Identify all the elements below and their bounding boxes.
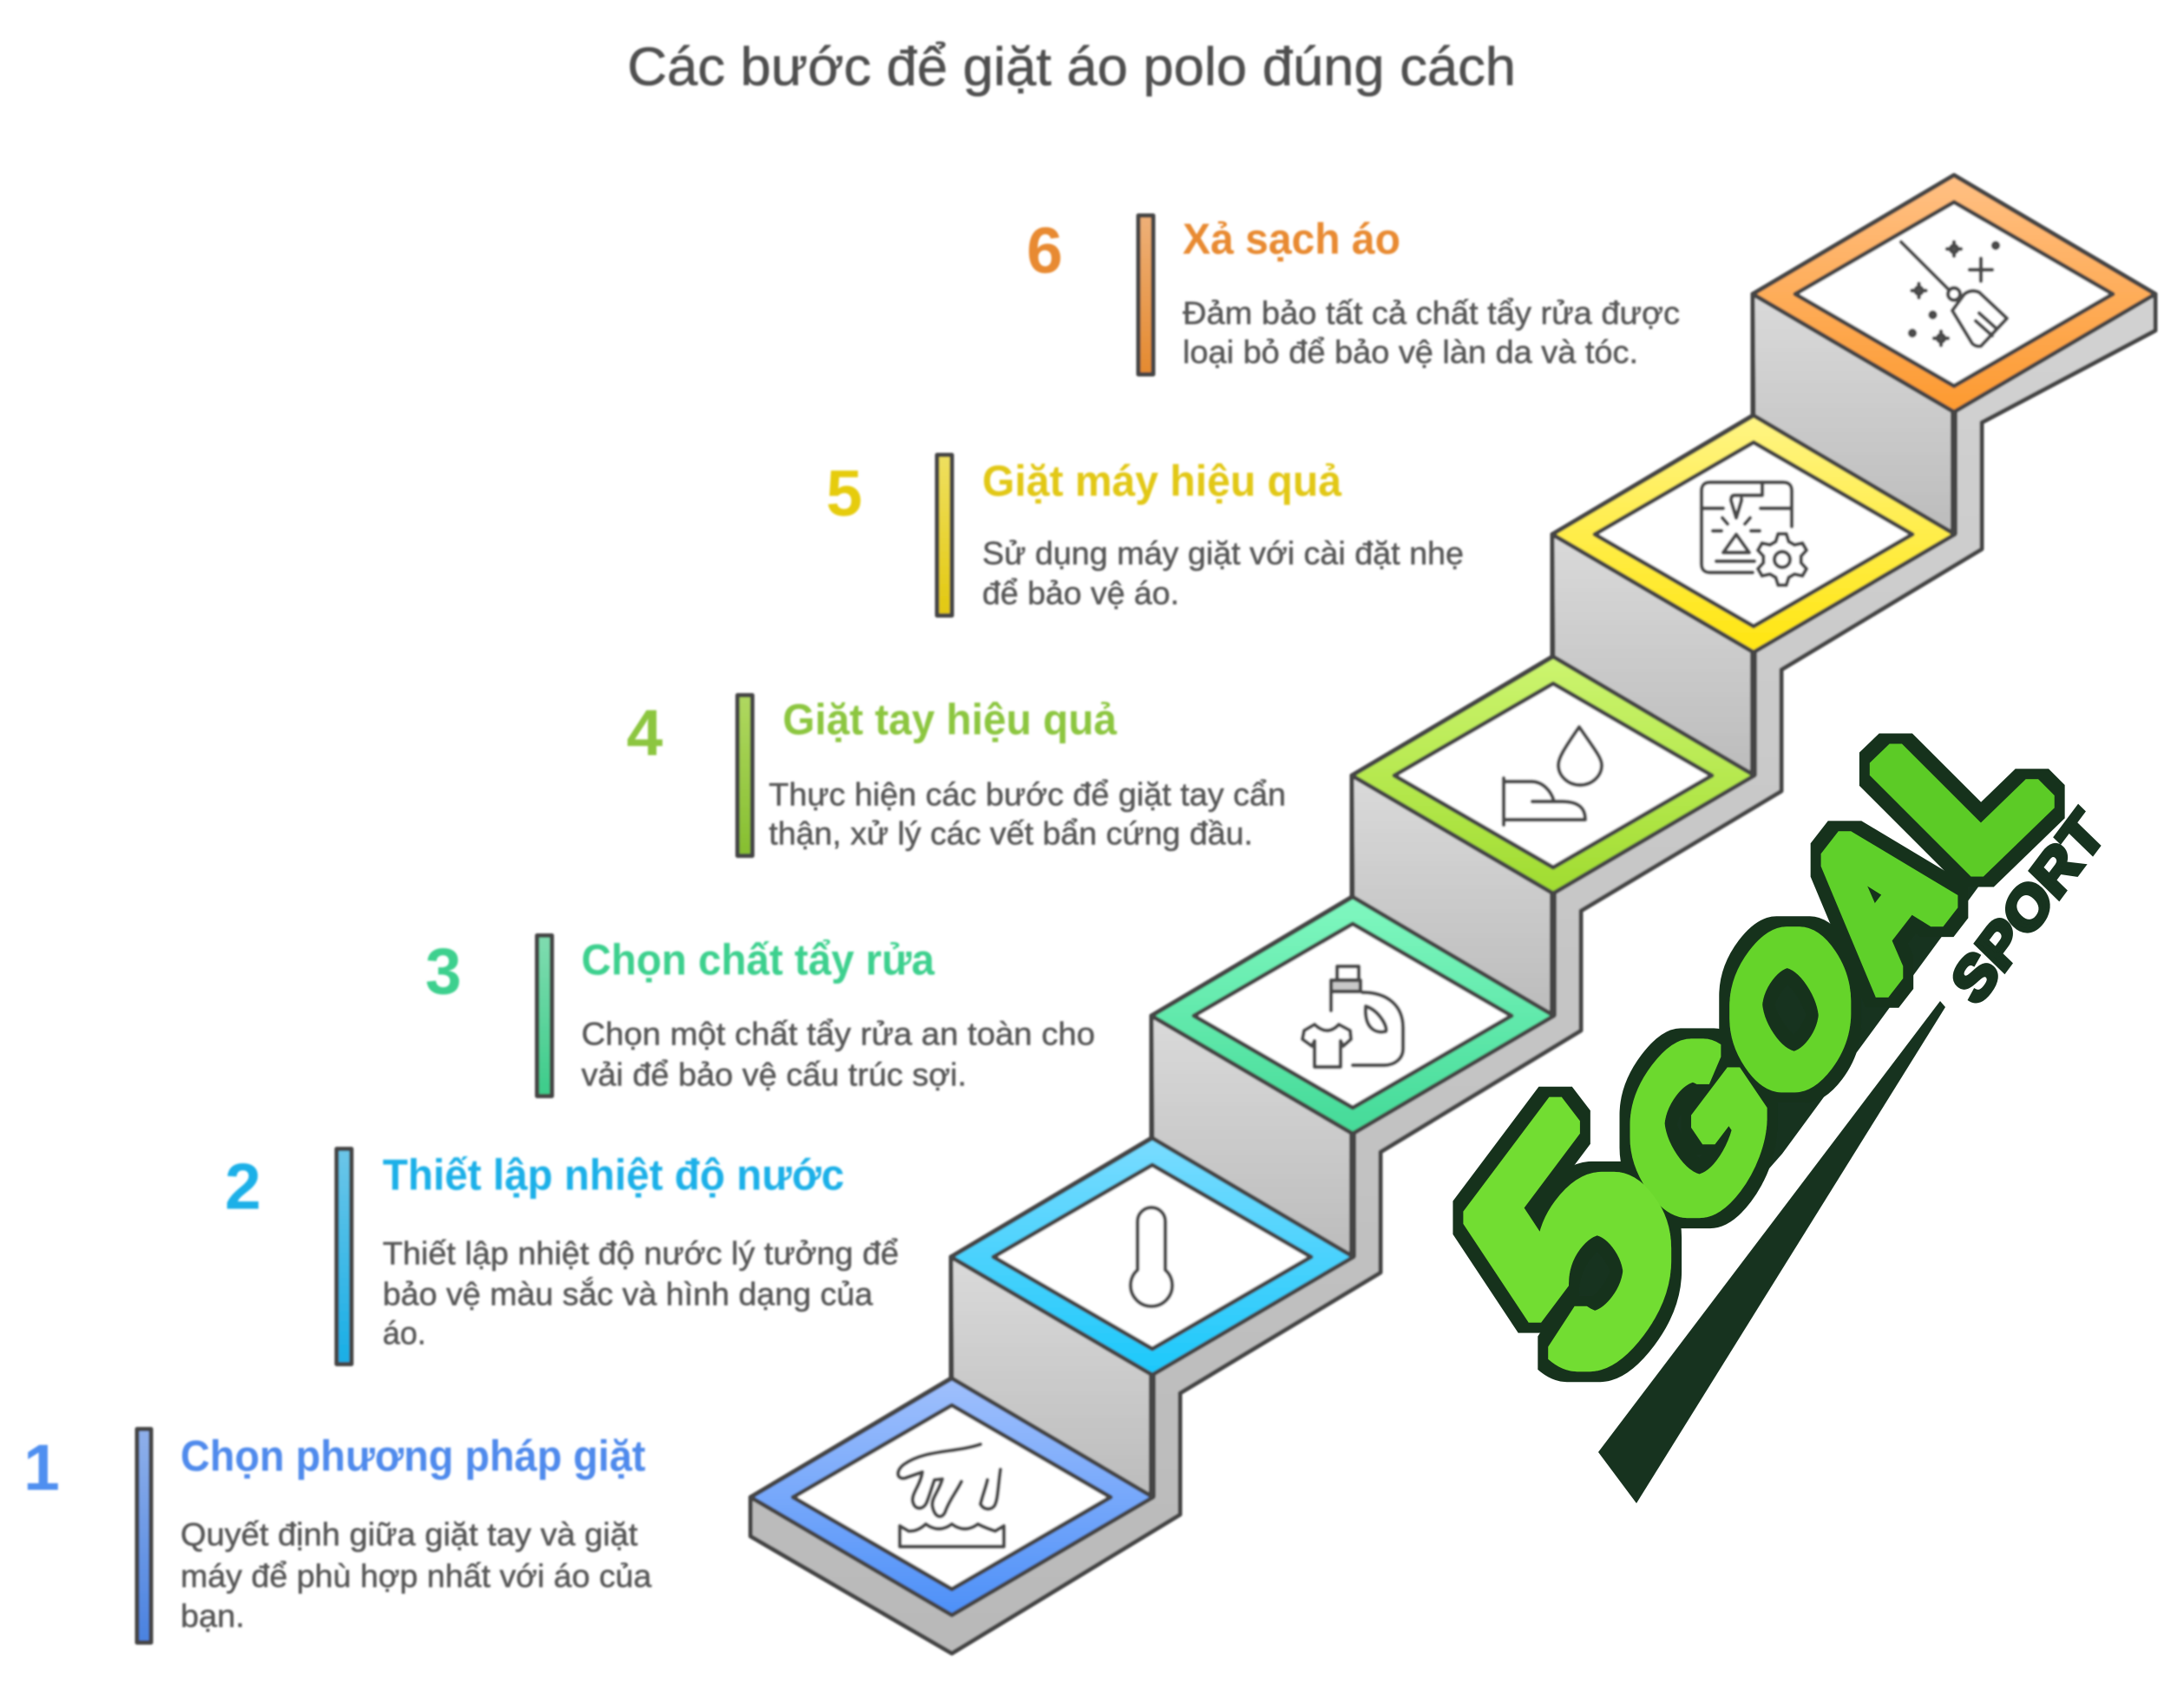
number 3: 3 [425,935,462,1008]
logo wordmark [1414,664,2084,1454]
bar 6 [1138,215,1153,375]
logo: 5GOAL SPORT [1414,664,2116,1503]
wall between steps 3 and 4 [1352,775,1553,1016]
text step 6 [1026,213,1680,375]
wall between steps 1 and 2 [951,1257,1152,1497]
step 4 tile [1352,657,1754,893]
step 6 tile [1753,175,2155,412]
wall between steps 5 and 6 [1753,294,1954,534]
bar 2 [337,1148,351,1364]
logo wordmark: L [1835,664,2084,912]
logo underline band [1735,867,1982,1197]
icon: hand washing [898,1444,1004,1547]
body 5: để bảo vệ áo. [982,576,1179,611]
step 2 tile [951,1138,1354,1375]
logo wordmark: G [1589,977,1804,1281]
number 5: 5 [826,456,862,529]
bar 4 [738,696,752,855]
body 4: Thực hiện các bước để giặt tay cẩn [769,777,1286,812]
step 3 tile [1151,897,1554,1134]
icon: detergent bottle and shirt [1302,966,1403,1067]
body 1: máy để phù hợp nhất với áo của [180,1558,652,1594]
wall corner edges [1152,412,1954,1497]
body 6: Đảm bảo tất cả chất tẩy rửa được [1183,295,1680,331]
icon: broom and sparkles [1901,242,2007,346]
number 2: 2 [225,1150,261,1223]
body 2: Thiết lập nhiệt độ nước lý tưởng để [383,1235,899,1272]
staircase [751,175,2155,1653]
body 3 [581,1017,1095,1093]
staircase side silhouette [751,175,2155,1653]
title: Các bước để giặt áo polo đúng cách [627,37,1516,97]
text step 4 [626,696,1286,855]
heading 2: Thiết lập nhiệt độ nước [383,1150,844,1199]
body 4: thận, xử lý các vết bẩn cứng đầu. [769,815,1253,852]
text step 1 [23,1430,652,1643]
body 2: bảo vệ màu sắc và hình dạng của [383,1277,873,1312]
text step 5 [826,455,1464,616]
bar 5 [937,455,952,616]
icon: washing machine and gear [1702,482,1807,586]
body 6: loại bỏ để bảo vệ làn da và tóc. [1183,335,1638,370]
logo tagline: SPORT [1940,799,2116,1017]
heading 6: Xả sạch áo [1183,215,1400,264]
heading 1: Chọn phương pháp giặt [180,1431,646,1480]
number 1: 1 [23,1431,60,1504]
body 1: Quyết định giữa giặt tay và giặt [180,1516,639,1553]
number 4: 4 [626,696,663,769]
body 1: bạn. [180,1598,245,1634]
step 1 tile [751,1378,1153,1615]
icon: thermometer [1131,1207,1172,1306]
wall between steps 2 and 3 [1151,1016,1353,1257]
body 4 [769,777,1286,852]
body 5: Sử dụng máy giặt với cài đặt nhẹ [982,536,1464,571]
body 3: vải để bảo vệ cấu trúc sợi. [581,1057,967,1093]
body 2: áo. [383,1315,426,1351]
logo wordmark: O [1691,868,1890,1151]
logo wedge [1598,1001,1945,1503]
step 5 tile [1552,416,1955,652]
heading 5: Giặt máy hiệu quả [982,456,1342,505]
text step 3 [425,935,1095,1096]
bar 3 [537,935,552,1096]
logo wordmark: A [1774,770,1980,1025]
body 2 [383,1235,899,1351]
body 6 [1183,295,1680,370]
heading 4: Giặt tay hiệu quả [783,696,1118,744]
logo counters backing [1571,876,1900,1319]
number 6: 6 [1026,213,1063,286]
bar 1 [137,1430,151,1643]
text step 2 [225,1148,899,1364]
logo wordmark: 5 [1414,1032,1734,1454]
body 5 [982,536,1464,611]
body 3: Chọn một chất tẩy rửa an toàn cho [581,1017,1095,1051]
heading 3: Chọn chất tẩy rửa [581,935,935,984]
icon: water drop and iron [1504,727,1602,825]
wall between steps 4 and 5 [1552,534,1754,775]
body 1 [180,1516,652,1634]
